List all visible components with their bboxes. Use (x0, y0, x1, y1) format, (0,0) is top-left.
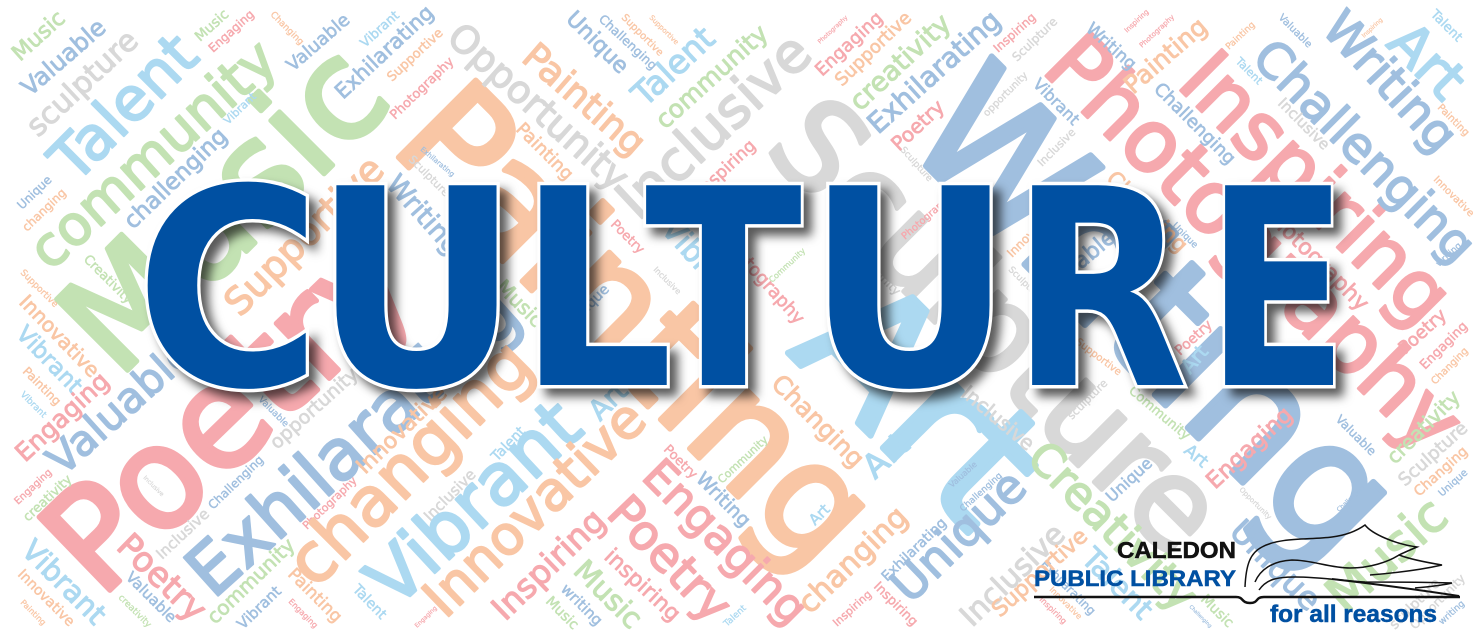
word cloud background: Innovative (1048, 585, 1084, 621)
word cloud background: changing (271, 324, 549, 602)
word cloud background: Challenging (958, 471, 1005, 514)
word cloud background: Poetry (1172, 317, 1216, 359)
title: CULTURE: U (313, 131, 520, 450)
word cloud background: community (202, 533, 300, 629)
word cloud background: Innovative (352, 381, 452, 479)
word cloud background: Unique (1170, 221, 1200, 251)
word cloud background: Poetry (886, 94, 949, 156)
word cloud background: Vibrant (233, 582, 285, 633)
word cloud background: Inclusive (957, 380, 1040, 455)
word cloud background: Inspiring (1038, 595, 1068, 626)
word cloud background: Vibrant (221, 90, 259, 127)
word cloud background: Art (805, 500, 834, 529)
word cloud background: Changing (1411, 443, 1471, 500)
word cloud background: Opportunity (439, 14, 638, 199)
word cloud background: Inspiring (1123, 8, 1150, 34)
word cloud background: Supportive (648, 14, 680, 46)
word cloud background: Community (715, 433, 771, 486)
word cloud background: Community (1125, 384, 1193, 444)
word cloud background: Vibrant (15, 533, 113, 631)
word cloud background: Poetry (1394, 304, 1451, 359)
word cloud background: Talent (1426, 7, 1465, 45)
word cloud background: Valuable (1276, 12, 1314, 50)
word cloud background: Poetry (596, 484, 743, 633)
logo text: PUBLIC LIBRARY: PUBLIC LIBRARY (1034, 566, 1236, 591)
word cloud background: Challenging (1336, 484, 1367, 513)
word cloud background: Photography (900, 192, 955, 242)
title: CULTURE: C (135, 131, 322, 450)
word cloud background: Valuable (37, 328, 203, 484)
word cloud background: Art (854, 424, 917, 486)
word cloud background: Exhilarating (170, 271, 536, 613)
word cloud background: Supportive (987, 524, 1093, 622)
word cloud background: changing (791, 499, 915, 621)
word cloud background: Engaging (414, 605, 439, 629)
word cloud background: Engaging (1201, 402, 1298, 494)
word cloud background: Talent (721, 603, 749, 630)
word cloud background: Challenging (1242, 28, 1482, 274)
word cloud background: creativity (20, 472, 76, 525)
word cloud background: Writing (871, 29, 1440, 598)
title: CULTURE: T (645, 131, 802, 450)
word cloud background: Creativity (1017, 430, 1209, 622)
word cloud background: sculpture (1065, 377, 1110, 422)
word cloud background: Poetry (109, 526, 215, 630)
word cloud background: Challenging (1149, 79, 1240, 169)
word cloud background: Talent (488, 423, 529, 465)
word cloud background: Poetry (607, 217, 647, 257)
word cloud background: Unique (880, 459, 1038, 614)
title: CULTURE: L (518, 131, 673, 450)
title: CULTURE: T (645, 131, 802, 450)
title: CULTURE: U (806, 131, 1013, 450)
word cloud background: Music (1314, 486, 1459, 624)
word cloud background: Inclusive (420, 465, 479, 525)
word cloud background: Valuable (1033, 225, 1121, 305)
word cloud background: changing (19, 186, 69, 234)
word cloud background: Photography (817, 14, 850, 45)
word cloud background: Engaging (9, 366, 115, 467)
word cloud background: Vibrant (349, 383, 597, 622)
word cloud background: Changing (766, 369, 870, 473)
word cloud background: writing (557, 580, 606, 629)
word cloud background: Inclusive (953, 517, 1072, 634)
word cloud background: Painting (20, 364, 64, 408)
word cloud background: sculpture (1387, 575, 1444, 633)
word cloud background: Valuable (947, 460, 979, 489)
word cloud background: Exhilarating (1038, 557, 1099, 618)
word cloud background: creativity (116, 593, 153, 630)
word cloud background: Opportunity (1407, 571, 1468, 632)
word cloud background: Talent (1074, 540, 1160, 626)
word cloud background: Music (7, 6, 71, 66)
title: CULTURE: C (135, 131, 322, 450)
word cloud background: Vibrant (18, 390, 48, 421)
logo text: for all reasons: for all reasons (1270, 601, 1437, 628)
word cloud background: Sculpture (406, 153, 452, 199)
word cloud background: creativity (844, 8, 957, 117)
word cloud background: Sculpture (741, 70, 1253, 581)
word cloud background: Inspiring (1162, 33, 1472, 343)
word cloud background: Changing (268, 10, 305, 47)
word cloud background: Valuable (256, 395, 290, 430)
word cloud background: Music (1197, 592, 1237, 631)
word cloud background: Exhilarating (419, 145, 456, 178)
word cloud background: Innovative (1004, 206, 1059, 260)
word cloud background: Painting (283, 564, 346, 627)
word cloud background: Opportunity (1238, 486, 1273, 521)
word cloud background: Challenging (1188, 604, 1213, 629)
word cloud background: Valuable (122, 568, 180, 626)
word cloud background: Music (567, 553, 649, 635)
word cloud background: Opportunity (843, 237, 904, 298)
word cloud background: Supportive (215, 147, 392, 324)
word cloud background: Painting (1224, 20, 1258, 52)
word cloud background: Painting (511, 119, 578, 185)
word cloud background: Inspiring (483, 501, 613, 628)
word cloud background: Inclusive (1274, 94, 1334, 153)
word cloud background: Inclusive (152, 505, 213, 563)
word cloud background: opportunity (981, 70, 1030, 119)
word cloud background: Photography (1025, 14, 1482, 472)
word cloud background: Valuable (1333, 412, 1379, 458)
word cloud background: Painting (363, 49, 912, 599)
word cloud background: Unique (1102, 454, 1156, 506)
word cloud background: Unique (561, 7, 633, 79)
word cloud background: Inspiring (693, 136, 760, 201)
word cloud background: Innovative (14, 567, 78, 630)
word cloud background: Inspiring (1361, 17, 1384, 39)
word cloud background: Community (767, 246, 807, 284)
word cloud background: Photography (387, 54, 458, 123)
word cloud background: Sculpture (1394, 418, 1472, 491)
word cloud background: Creativity (80, 252, 135, 308)
word cloud background: Writing (1311, 0, 1469, 164)
word cloud background: Sculpture (1006, 265, 1044, 303)
word cloud background: Vibrant (1029, 74, 1084, 129)
word cloud background: Inclusive (1035, 126, 1078, 169)
word cloud background: Engaging (632, 448, 819, 635)
word cloud background: Engaging (287, 597, 320, 630)
word cloud background: writing (1434, 241, 1464, 269)
word cloud background: Unique (1437, 467, 1470, 499)
word cloud background: Talent (1232, 54, 1266, 88)
word cloud background: Changing (1429, 346, 1471, 387)
word cloud background: Inclusive (652, 265, 683, 296)
title: CULTURE: U (313, 131, 520, 450)
word cloud background: opportunity (266, 363, 363, 454)
word cloud background: Photography (1138, 13, 1176, 49)
word cloud background: Art (757, 238, 1085, 566)
word cloud background: Art (1376, 9, 1479, 112)
word cloud background: Photography (300, 474, 360, 532)
word cloud background: Supportive (1073, 337, 1123, 378)
word cloud background: Innovative (14, 290, 105, 382)
word cloud background: Engaging (811, 8, 887, 81)
word cloud background: Vibrant (654, 212, 753, 316)
title: CULTURE: U (806, 131, 1013, 450)
word cloud background: Inspiring (830, 588, 874, 629)
word cloud background: Vibrant (358, 8, 403, 51)
word cloud background: Engaging (1417, 319, 1471, 373)
word cloud background: Painting (1435, 102, 1471, 139)
word cloud background: Valuable (283, 9, 354, 76)
word cloud background: Challenging (596, 11, 660, 73)
title: CULTURE (135, 131, 1348, 450)
word cloud background: Writing (691, 468, 755, 532)
word cloud background: Writing (380, 169, 467, 261)
word cloud background: Changing (1101, 167, 1192, 258)
word cloud background: Unique (1222, 512, 1329, 618)
word cloud background: Supportive (18, 268, 60, 310)
word cloud background: Art (582, 374, 634, 427)
logo text: CALEDON: CALEDON (1117, 537, 1236, 563)
word cloud background: Exhilarating (879, 515, 950, 585)
word cloud background: Vibrant (11, 321, 87, 399)
word cloud background: Sculpture (1009, 14, 1060, 64)
word cloud background: Innovative (1431, 174, 1476, 219)
word cloud background: Music (491, 275, 549, 332)
word cloud background: challenging (119, 123, 233, 234)
word cloud background: Supportive (384, 26, 446, 85)
word cloud background: community (16, 27, 289, 282)
title: CULTURE: L (518, 131, 673, 450)
word cloud background: Sculpture (898, 145, 934, 184)
word cloud background: Painting (1118, 12, 1213, 100)
word cloud background: Supportive (831, 7, 916, 91)
word cloud background: Innovative (410, 387, 658, 629)
word cloud background: Talent (35, 20, 212, 196)
word cloud background: Poetry (660, 442, 700, 482)
word cloud background: Painting (19, 598, 48, 627)
word cloud background: writing (1437, 599, 1467, 627)
icon: open book (1034, 525, 1460, 603)
word cloud background: Exhilarating (330, 0, 438, 104)
logo: Caledon Public Library (1034, 525, 1460, 628)
word cloud background: sculpture (20, 23, 145, 144)
word cloud background: community (650, 18, 774, 134)
word cloud background: Inspiring (991, 10, 1039, 55)
word cloud background: Unique (14, 173, 55, 212)
word cloud background: Writing (1082, 19, 1140, 74)
word cloud background: Music (192, 6, 232, 45)
word cloud background: Unique (567, 282, 613, 328)
word cloud background: Photography (1257, 200, 1374, 316)
word cloud background: creativity (1382, 385, 1465, 469)
word cloud background: Engaging (206, 7, 257, 55)
word cloud background: Music (542, 594, 582, 633)
word cloud background: Poetry (10, 197, 445, 624)
word cloud background: Art (1175, 340, 1213, 378)
word cloud background: Valuable (16, 13, 111, 102)
word cloud background: Music (27, 12, 419, 403)
word cloud background: inspiring (599, 544, 685, 627)
word cloud background: Supportive (619, 12, 665, 59)
word cloud background: Engaging (13, 467, 54, 507)
word cloud background: Photography (716, 229, 809, 329)
word cloud background: Art (1180, 441, 1212, 472)
word cloud background: Talent (623, 18, 722, 115)
word cloud background: Painting (514, 34, 655, 164)
word cloud background: Inclusive (603, 20, 824, 232)
title: CULTURE: E (1206, 132, 1348, 450)
word cloud background: Exhilarating (861, 3, 1007, 140)
title: CULTURE: R (1011, 131, 1188, 450)
word cloud background: Challenging (205, 453, 266, 512)
word cloud background: Inclusive (142, 474, 165, 498)
word cloud background: Talent (348, 581, 390, 623)
word cloud background: Inspiring (870, 579, 920, 630)
title: CULTURE: E (1206, 132, 1348, 450)
title: CULTURE: R (1011, 131, 1188, 450)
